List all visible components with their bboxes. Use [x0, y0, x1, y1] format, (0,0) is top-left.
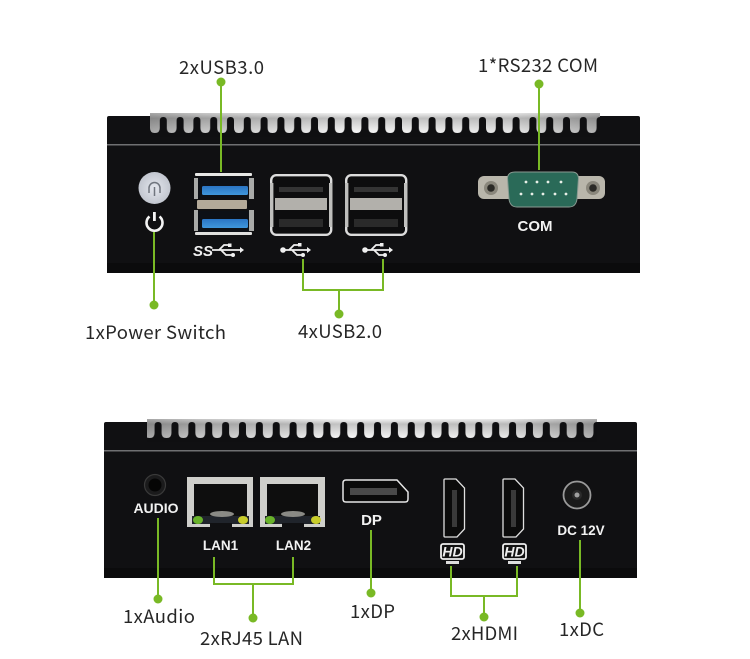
callout: 1xDC [559, 540, 604, 642]
LAN2 port [260, 477, 325, 553]
DisplayPort: DP [361, 512, 382, 529]
callout: 2xRJ45 LAN: 2xRJ45 LAN [200, 625, 303, 651]
heat-sink fins [147, 419, 597, 442]
HDMI port right: HD [504, 544, 525, 560]
callout: 1xAudio [123, 518, 195, 629]
HDMI port left: HD [442, 544, 463, 560]
audio jack: AUDIO [133, 500, 179, 516]
USB 2.0 ports left [270, 175, 332, 257]
callout: 2xUSB3.0: 2xUSB3.0 [179, 54, 264, 80]
callout: 1xDC: 1xDC [559, 616, 604, 642]
audio jack [133, 474, 179, 516]
heat-sink fins [150, 113, 600, 137]
power button [138, 172, 170, 231]
LAN1 port [187, 477, 253, 553]
callout: 1xAudio: 1xAudio [123, 603, 195, 629]
callout: 1xPower Switch [85, 232, 226, 345]
USB 3.0 ports [193, 173, 254, 260]
COM serial port [478, 172, 605, 235]
device: top panel [107, 113, 640, 273]
USB 3.0 ports: SS [193, 243, 213, 260]
callout: 1*RS232 COM: 1*RS232 COM [478, 52, 598, 78]
DC power jack [557, 482, 605, 538]
callout: 2xHDMI: 2xHDMI [451, 620, 518, 646]
HDMI port left [441, 479, 464, 564]
callout: 2xHDMI [451, 566, 518, 646]
DisplayPort [343, 480, 408, 529]
callout: 1xPower Switch: 1xPower Switch [85, 319, 226, 345]
callout: 4xUSB2.0: 4xUSB2.0 [298, 318, 382, 344]
callout: 2xUSB3.0 [179, 54, 264, 172]
LAN2 port: LAN2 [276, 538, 311, 553]
HDMI port right [503, 479, 526, 564]
callout: 1*RS232 COM [478, 52, 598, 170]
callout: 1xDP [350, 530, 395, 624]
device: bottom panel [104, 419, 637, 578]
callout: 1xDP: 1xDP [350, 598, 395, 624]
callout: 4xUSB2.0 [298, 259, 383, 344]
LAN1 port: LAN1 [203, 538, 239, 553]
callout: 2xRJ45 LAN [200, 557, 303, 651]
DC power jack: DC 12V [557, 523, 605, 538]
USB 2.0 ports right [345, 175, 407, 257]
COM serial port: COM [518, 218, 552, 235]
